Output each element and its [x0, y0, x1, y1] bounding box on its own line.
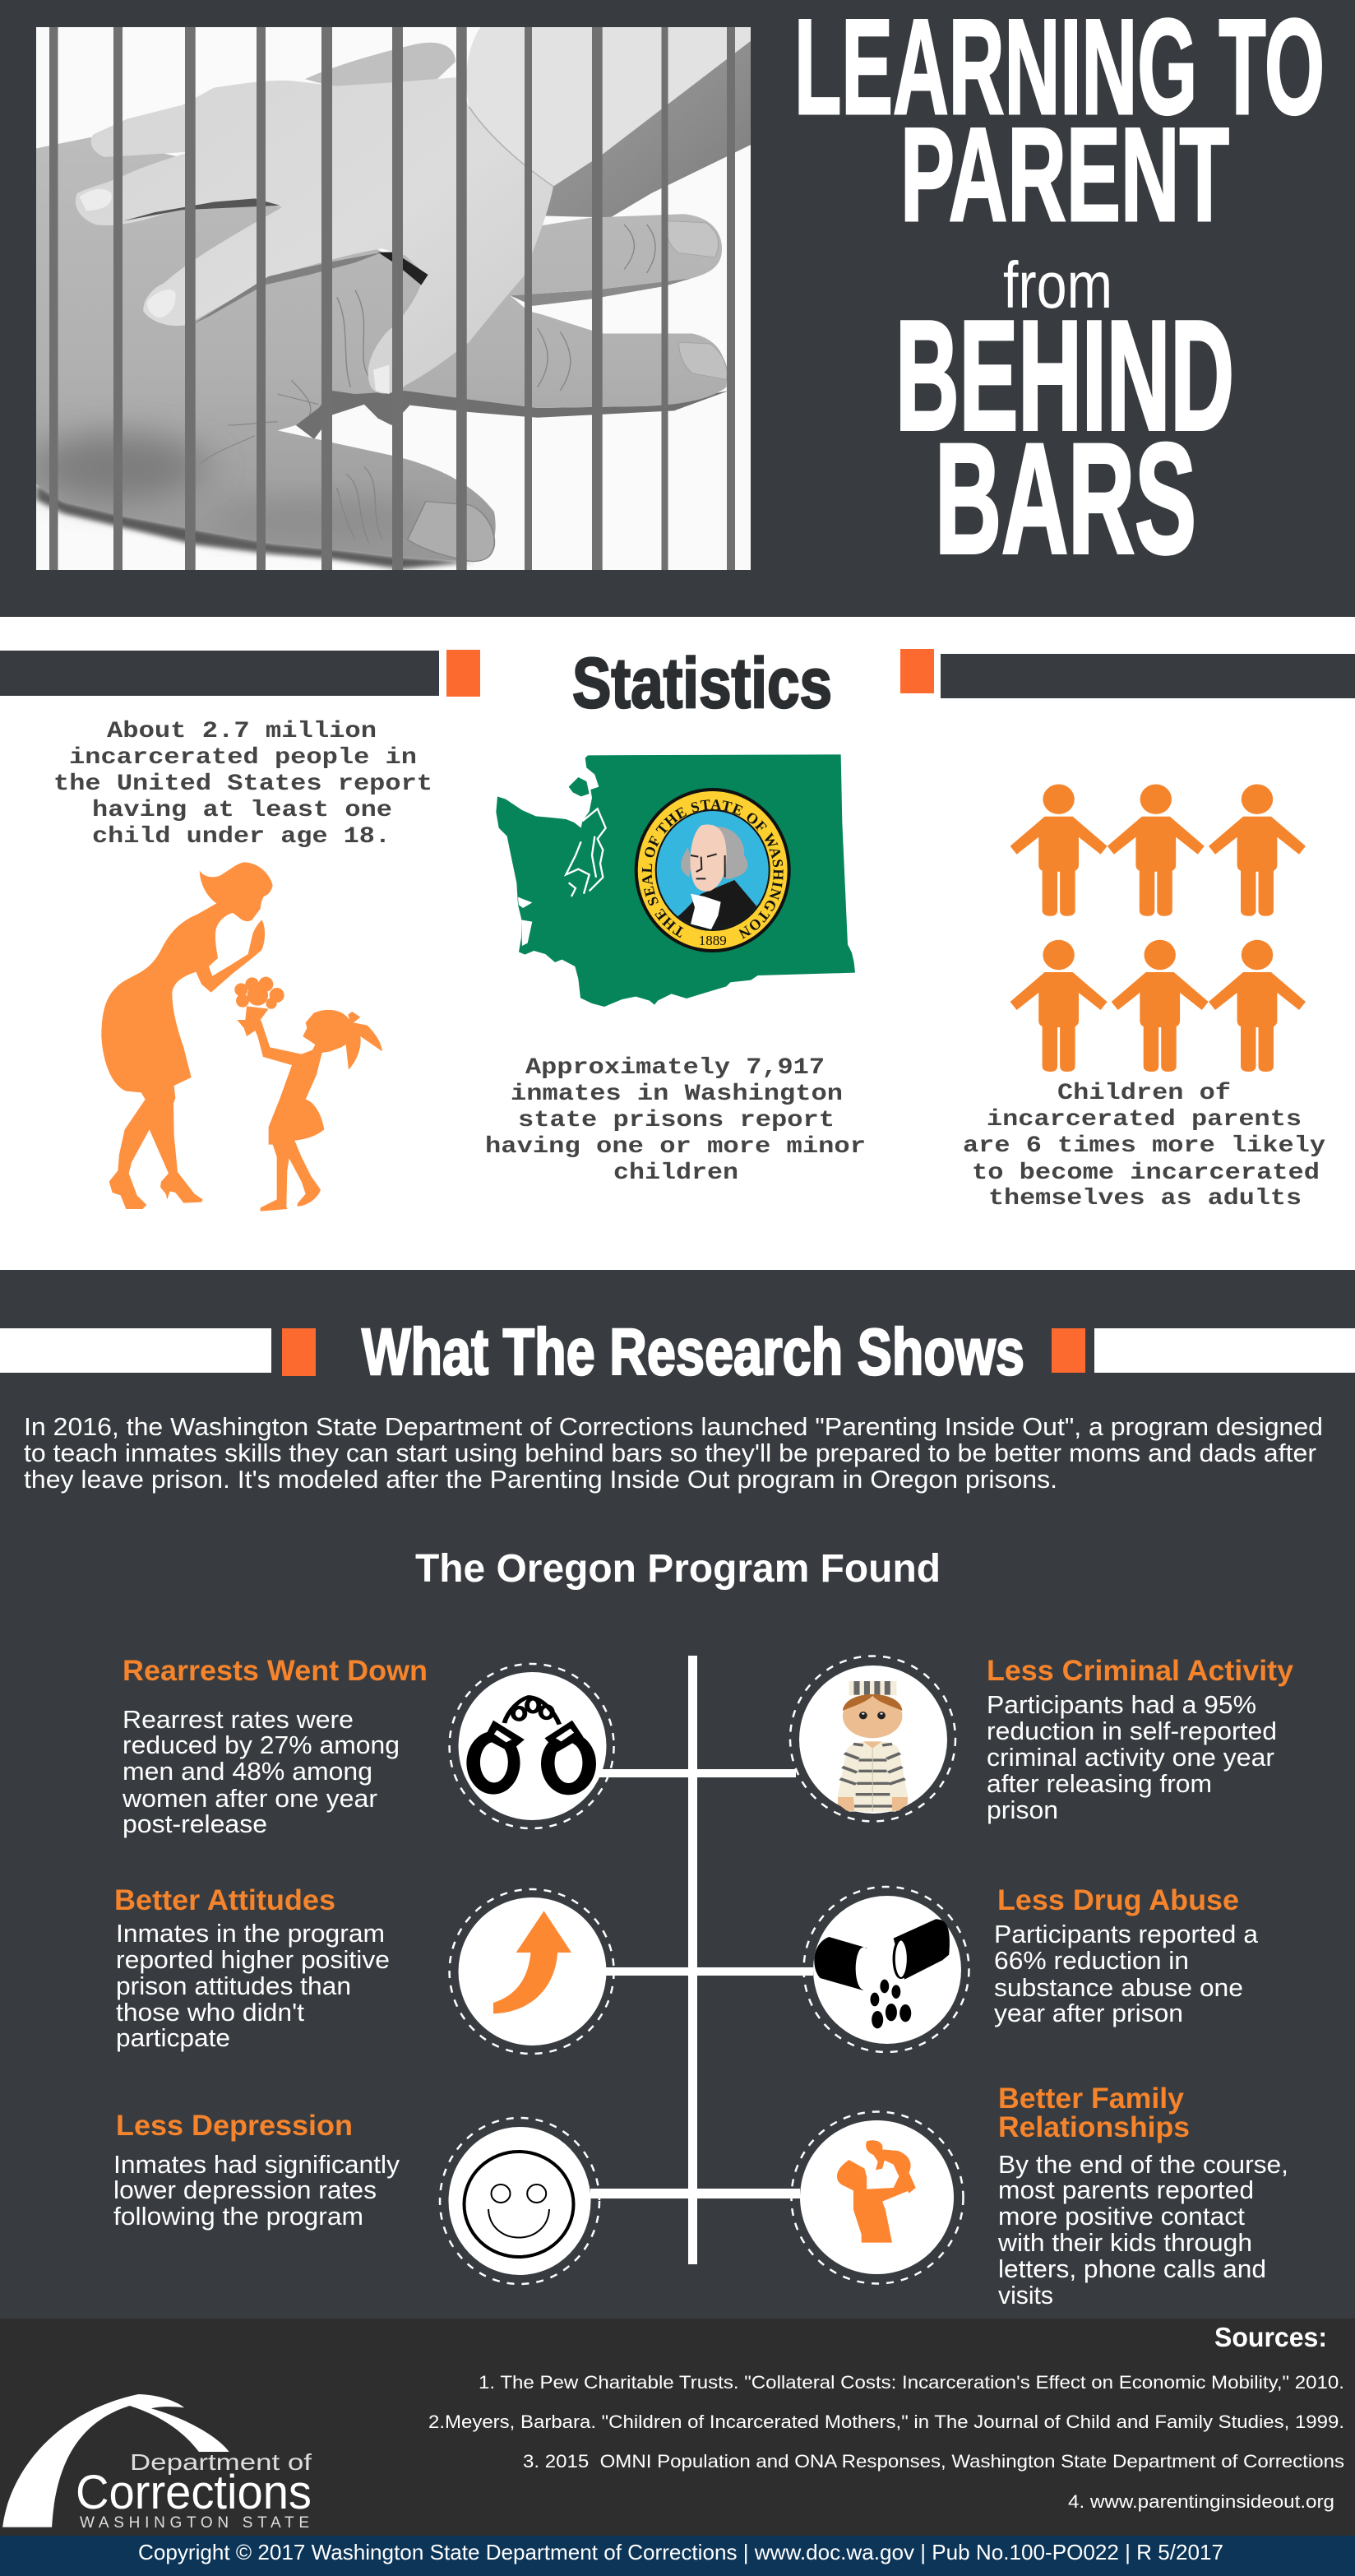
finding: rearrests went down: post-release [123, 1809, 267, 1838]
finding: better attitudes [114, 1884, 390, 2052]
finding: rearrests went down: Rearrest rates were [123, 1705, 354, 1734]
finding: less depression: following the program [113, 2202, 363, 2231]
text: 7,917 inmates: Approximately 7,917 [525, 1055, 825, 1081]
icon: mother and daughter silhouette [101, 862, 382, 1212]
finding: less depression [113, 2110, 400, 2231]
finding: rearrests went down: reduced by 27% among [123, 1730, 400, 1759]
panel: hero [36, 17, 1322, 570]
source list: 2.Meyers, Barbara. "Children of Incarcerated Mothers," in The Journal of Child and Family Studies, 1999. [428, 2412, 1344, 2432]
finding: less criminal activity: prison [987, 1795, 1058, 1824]
text: 6 times more likely: incarcerated parents [987, 1107, 1302, 1133]
text: 6 times more likely: Children of [1057, 1081, 1231, 1106]
finding: better family relationships: visits [998, 2281, 1053, 2310]
finding: less depression: lower depression rates [113, 2175, 377, 2204]
title: from [1003, 248, 1112, 322]
text: 2.7 million: About 2.7 million [107, 719, 377, 744]
text: 6 times more likely: themselves as adults [988, 1186, 1302, 1212]
seal of Washington: THE SEAL OF THE STATE OF WASHINGTON [641, 799, 784, 939]
logo: Department of Corrections: Department of [130, 2449, 312, 2475]
footer: copyright: Copyright © 2017 Washington State Department of Corrections | www.doc.wa.gov | Pub No.100-PO022 | R 5/2017 [138, 2540, 1223, 2564]
finding: less criminal activity [987, 1655, 1294, 1824]
finding: rearrests went down [122, 1655, 428, 1838]
text: 7,917 inmates: inmates in Washington [511, 1082, 843, 1107]
footer: copyright [0, 2536, 1355, 2576]
finding: less drug abuse: Participants reported a [994, 1920, 1259, 1948]
icon: parent lifting child [791, 2112, 964, 2283]
finding: less criminal activity: after releasing from [987, 1769, 1212, 1798]
finding: better family relationships: letters, phone calls and [998, 2254, 1266, 2283]
text: 2.7 million: having at least one [92, 798, 392, 823]
finding: less drug abuse: substance abuse one [994, 1973, 1243, 2002]
finding: less criminal activity: reduction in self-reported [987, 1717, 1277, 1745]
heading: Sources: Sources: [1214, 2322, 1327, 2352]
text: 2.7 million [53, 719, 432, 850]
finding: better attitudes: those who didn't [116, 1998, 304, 2027]
source list: 4. www.parentinginsideout.org [1068, 2491, 1334, 2512]
finding: better family relationships [997, 2083, 1288, 2310]
finding: less drug abuse: Less Drug Abuse [997, 1884, 1239, 1916]
icon: handcuffs [450, 1664, 614, 1828]
finding: better attitudes: particpate [116, 2023, 230, 2052]
finding: less drug abuse: 66% reduction in [994, 1946, 1189, 1975]
finding: rearrests went down: Rearrests Went Down [123, 1655, 428, 1687]
research header bars [0, 1328, 1355, 1376]
text: 7,917 inmates: state prisons report [518, 1108, 835, 1133]
heading: The Oregon Program Found: The Oregon Program Found [415, 1547, 941, 1591]
statistics header bars [0, 649, 1355, 698]
text: 7,917 inmates [485, 1055, 866, 1186]
heading: What The Research Shows: What The Research Shows [362, 1315, 1024, 1388]
source list [428, 2372, 1344, 2512]
logo: Department of Corrections [2, 2394, 312, 2532]
finding: better family relationships: more positive contact [998, 2202, 1245, 2231]
source list: 3. 2015 OMNI Population and ONA Responses, Washington State Department of Corrections [523, 2451, 1344, 2472]
source list: 1. The Pew Charitable Trusts. "Collateral Costs: Incarceration's Effect on Economic Mobility," 2010. [479, 2372, 1344, 2393]
icon: upward arrow [450, 1889, 614, 2054]
intro paragraph: In 2016, the Washington State Department of Corrections launched "Parenting Inside Out", a program designed [24, 1412, 1323, 1441]
finding: rearrests went down: men and 48% among [123, 1757, 372, 1786]
text: 6 times more likely: are 6 times more likely [963, 1133, 1325, 1159]
finding: better attitudes: prison attitudes than [116, 1971, 351, 2000]
finding: less drug abuse [994, 1884, 1259, 2027]
panel: what the research shows [0, 1270, 1355, 2319]
finding: better attitudes: Better Attitudes [114, 1884, 335, 1916]
text: 2.7 million: incarcerated people in [69, 745, 417, 771]
text: 2.7 million: child under age 18. [92, 824, 391, 850]
logo: Department of Corrections: WASHINGTON STATE [80, 2514, 309, 2532]
finding: better attitudes: reported higher positive [116, 1945, 390, 1974]
finding: better family relationships: with their kids through [997, 2228, 1252, 2257]
text: 6 times more likely: to become incarcerated [972, 1161, 1320, 1186]
prison bars [49, 27, 735, 570]
seal of Washington: 1889 [699, 933, 727, 948]
intro paragraph: to teach inmates skills they can start using behind bars so they'll be prepared to be better moms and dads after [24, 1439, 1316, 1467]
icon: six children [1010, 785, 1306, 1072]
icon: Washington state flag map [496, 754, 855, 1007]
photo: hands behind bars [31, 27, 751, 570]
text: 7,917 inmates: children [613, 1161, 738, 1186]
text: 2.7 million: the United States report [53, 771, 432, 797]
intro paragraph: they leave prison. It's modeled after the Parenting Inside Out program in Oregon prisons. [24, 1465, 1057, 1494]
finding: better family relationships: Better Family [998, 2083, 1185, 2115]
timeline connectors [590, 1656, 813, 2264]
logo: Department of Corrections: Corrections [76, 2466, 312, 2519]
heading: Statistics: Statistics [572, 644, 832, 723]
finding: less criminal activity: criminal activity one year [987, 1743, 1274, 1772]
finding: less depression: Inmates had significantly [113, 2150, 400, 2179]
finding: less criminal activity: Participants had a 95% [987, 1690, 1256, 1719]
finding: rearrests went down: women after one year [122, 1784, 377, 1813]
finding: better family relationships: Relationships [998, 2111, 1190, 2143]
text: 7,917 inmates: having one or more minor [485, 1134, 866, 1160]
panel: sources [0, 2319, 1355, 2536]
text: 6 times more likely [963, 1081, 1325, 1212]
finding: less criminal activity: Less Criminal Activity [987, 1655, 1294, 1687]
finding: less depression: Less Depression [116, 2110, 353, 2142]
title [794, 0, 1325, 586]
finding: better attitudes: Inmates in the program [116, 1919, 385, 1948]
finding: better family relationships: most parents reported [998, 2175, 1254, 2204]
icon: smiley face [440, 2118, 599, 2284]
finding: less drug abuse: year after prison [994, 1999, 1183, 2027]
intro paragraph [24, 1412, 1323, 1494]
finding: better family relationships: By the end of the course, [998, 2150, 1288, 2179]
icon: pill capsule [804, 1887, 969, 2052]
panel: statistics [0, 617, 1355, 1270]
icon: prisoner [790, 1656, 955, 1821]
